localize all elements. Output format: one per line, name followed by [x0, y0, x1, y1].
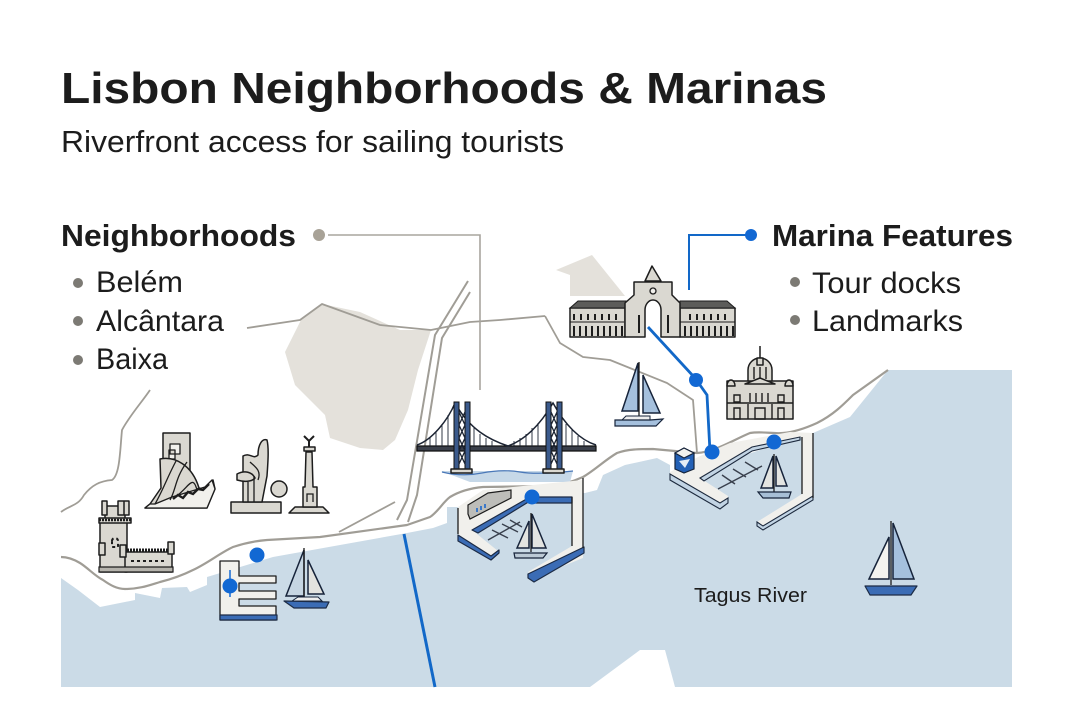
roads: [61, 281, 888, 589]
icon: Monument to the Discoveries: [145, 433, 215, 508]
upland areas: [285, 255, 625, 450]
icon: domed basilica: [727, 346, 793, 419]
list of marina features: Tour docks: [812, 267, 961, 300]
neighborhoods leader line: [328, 235, 480, 390]
panel: marina features legend: [745, 218, 1013, 338]
marina features leader line: [689, 235, 750, 290]
icon: sailboat west: [284, 548, 329, 608]
icon: sailboat north: [615, 362, 663, 426]
east marina: [670, 373, 813, 530]
list of neighborhoods: [73, 266, 224, 376]
marker: marina leader dot: [745, 229, 757, 241]
subtitle: Riverfront access for sailing tourists: [61, 124, 564, 159]
title: Lisbon Neighborhoods & Marinas: [61, 64, 827, 113]
list of marina features: Landmarks: [812, 305, 963, 338]
icon: tour dock kiosk: [675, 448, 694, 473]
icon: Belem tower: [99, 501, 174, 572]
list of neighborhoods: Alcântara: [96, 305, 224, 338]
central marina: [458, 478, 584, 582]
icon: Commerce Square arch: [570, 266, 735, 337]
river: [61, 370, 1012, 687]
heading: neighborhoods: Neighborhoods: [61, 218, 296, 253]
icon: sailboat river: [865, 521, 917, 595]
panel: neighborhoods legend: [61, 218, 325, 376]
list of neighborhoods: Belém: [96, 266, 183, 299]
list of marina features: [790, 267, 963, 338]
icon: column monument: [289, 436, 329, 513]
blue route south: [404, 534, 435, 687]
list of neighborhoods: Baixa: [96, 343, 168, 376]
marker: neighborhoods leader dot: [313, 229, 325, 241]
heading: marina features: Marina Features: [772, 218, 1013, 253]
blue route to commerce square: [648, 327, 710, 452]
icon: sailboat centre: [514, 513, 547, 558]
icon: suspension bridge: [417, 402, 596, 482]
neighborhood marina: [220, 548, 277, 620]
river label: Tagus River: [694, 585, 807, 607]
map: [61, 235, 1012, 687]
icon: sailboat east marina: [758, 454, 791, 498]
icon: statue with medallion: [231, 440, 287, 513]
